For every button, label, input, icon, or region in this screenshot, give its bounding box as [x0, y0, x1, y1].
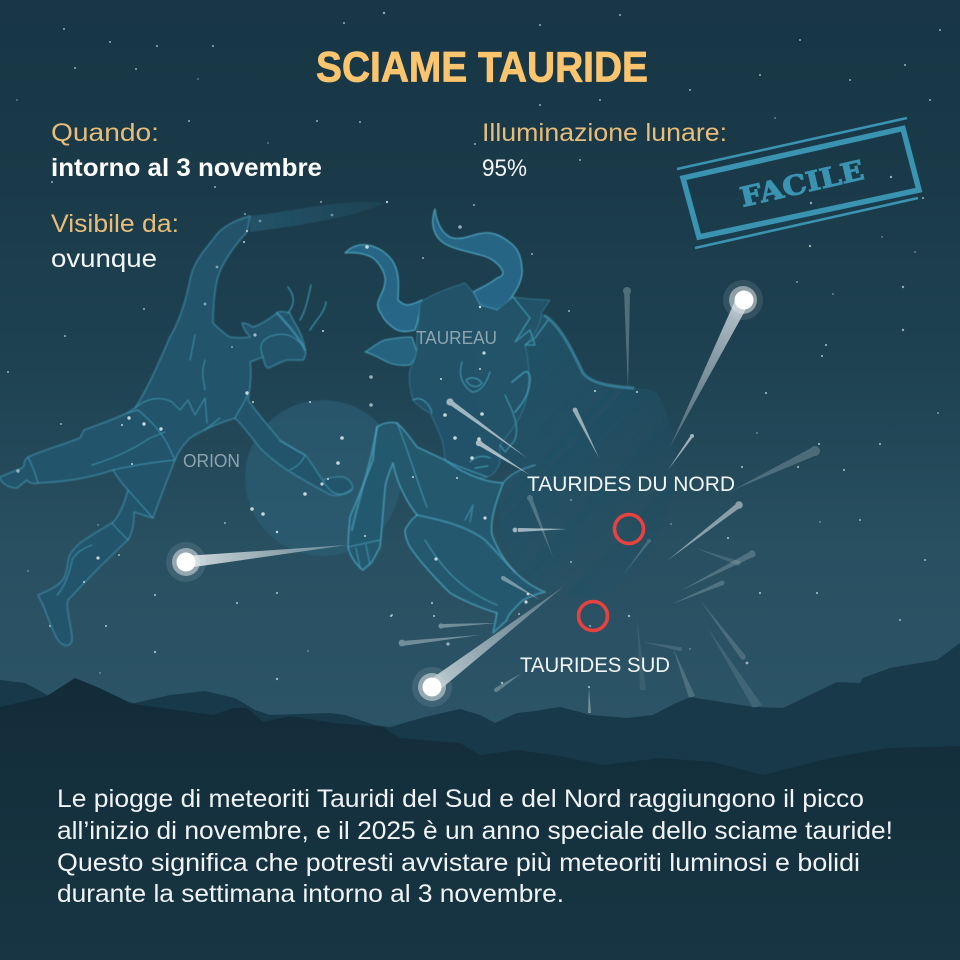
body text: durante la settimana intorno al 3 novembre. — [57, 880, 564, 908]
Orion shield circle — [245, 400, 401, 556]
radiant: Taurides du Nord — [614, 514, 644, 544]
info: Illuminazione lunare: Illuminazione lunare: — [482, 119, 727, 147]
Taurus left ear — [365, 337, 418, 365]
meteor: left bright — [166, 542, 347, 582]
info: Illuminazione lunare — [482, 119, 727, 182]
Taurus right horn — [433, 209, 522, 310]
Taurus left horn — [345, 245, 422, 332]
radiant: Taurides Sud — [578, 602, 608, 630]
label: Taureau: TAUREAU — [416, 328, 497, 348]
meteors: small streaks — [399, 287, 820, 713]
stamp: Facile: FACILE — [737, 155, 867, 214]
body text — [57, 785, 893, 908]
Taurus body — [470, 300, 676, 598]
Taurus leg details — [348, 423, 535, 605]
info: Quando: intorno al 3 novembre — [51, 154, 322, 182]
body text: Questo significa che potresti avvistare più meteoriti luminosi e bolidi — [57, 849, 860, 877]
body text: Le piogge di meteoriti Tauridi del Sud e del Nord raggiungono il picco — [57, 785, 864, 813]
info: Visibile da: Visibile da: — [51, 210, 179, 238]
info: Illuminazione lunare: 95% — [482, 155, 527, 182]
Taurus face details — [413, 297, 548, 477]
Taurus head — [409, 283, 550, 478]
info: Quando: Quando: — [51, 119, 159, 147]
Taurus neck ridge — [545, 316, 633, 388]
info: Visibile da — [51, 210, 179, 273]
info: Visibile da: ovunque — [51, 245, 157, 273]
info: Quando — [51, 119, 322, 182]
body text: all’inizio di novembre, e il 2025 è un anno speciale dello sciame tauride! — [57, 817, 893, 845]
mountains: back ridge — [0, 643, 960, 780]
mountains: front ridge — [0, 678, 960, 960]
label: Taurides Sud: TAURIDES SUD — [520, 654, 670, 677]
constellation: Orion — [0, 202, 401, 645]
Orion body — [0, 216, 353, 645]
night sky background — [0, 0, 960, 730]
label: Taurides du Nord: TAURIDES DU NORD — [527, 473, 735, 496]
Taurus forelegs — [348, 422, 545, 633]
meteors — [166, 280, 820, 713]
meteor: upper right bright — [670, 280, 763, 447]
stamp: Facile — [677, 118, 919, 248]
Orion raised forearm — [250, 202, 385, 232]
stars — [7, 12, 941, 688]
label: Orion: ORION — [183, 451, 240, 471]
Orion details — [28, 285, 352, 595]
meteor: bottom bright — [412, 587, 563, 707]
constellation: Taurus — [345, 209, 676, 633]
title: SCIAME TAURIDE — [316, 44, 648, 92]
constellation stars — [16, 201, 638, 604]
